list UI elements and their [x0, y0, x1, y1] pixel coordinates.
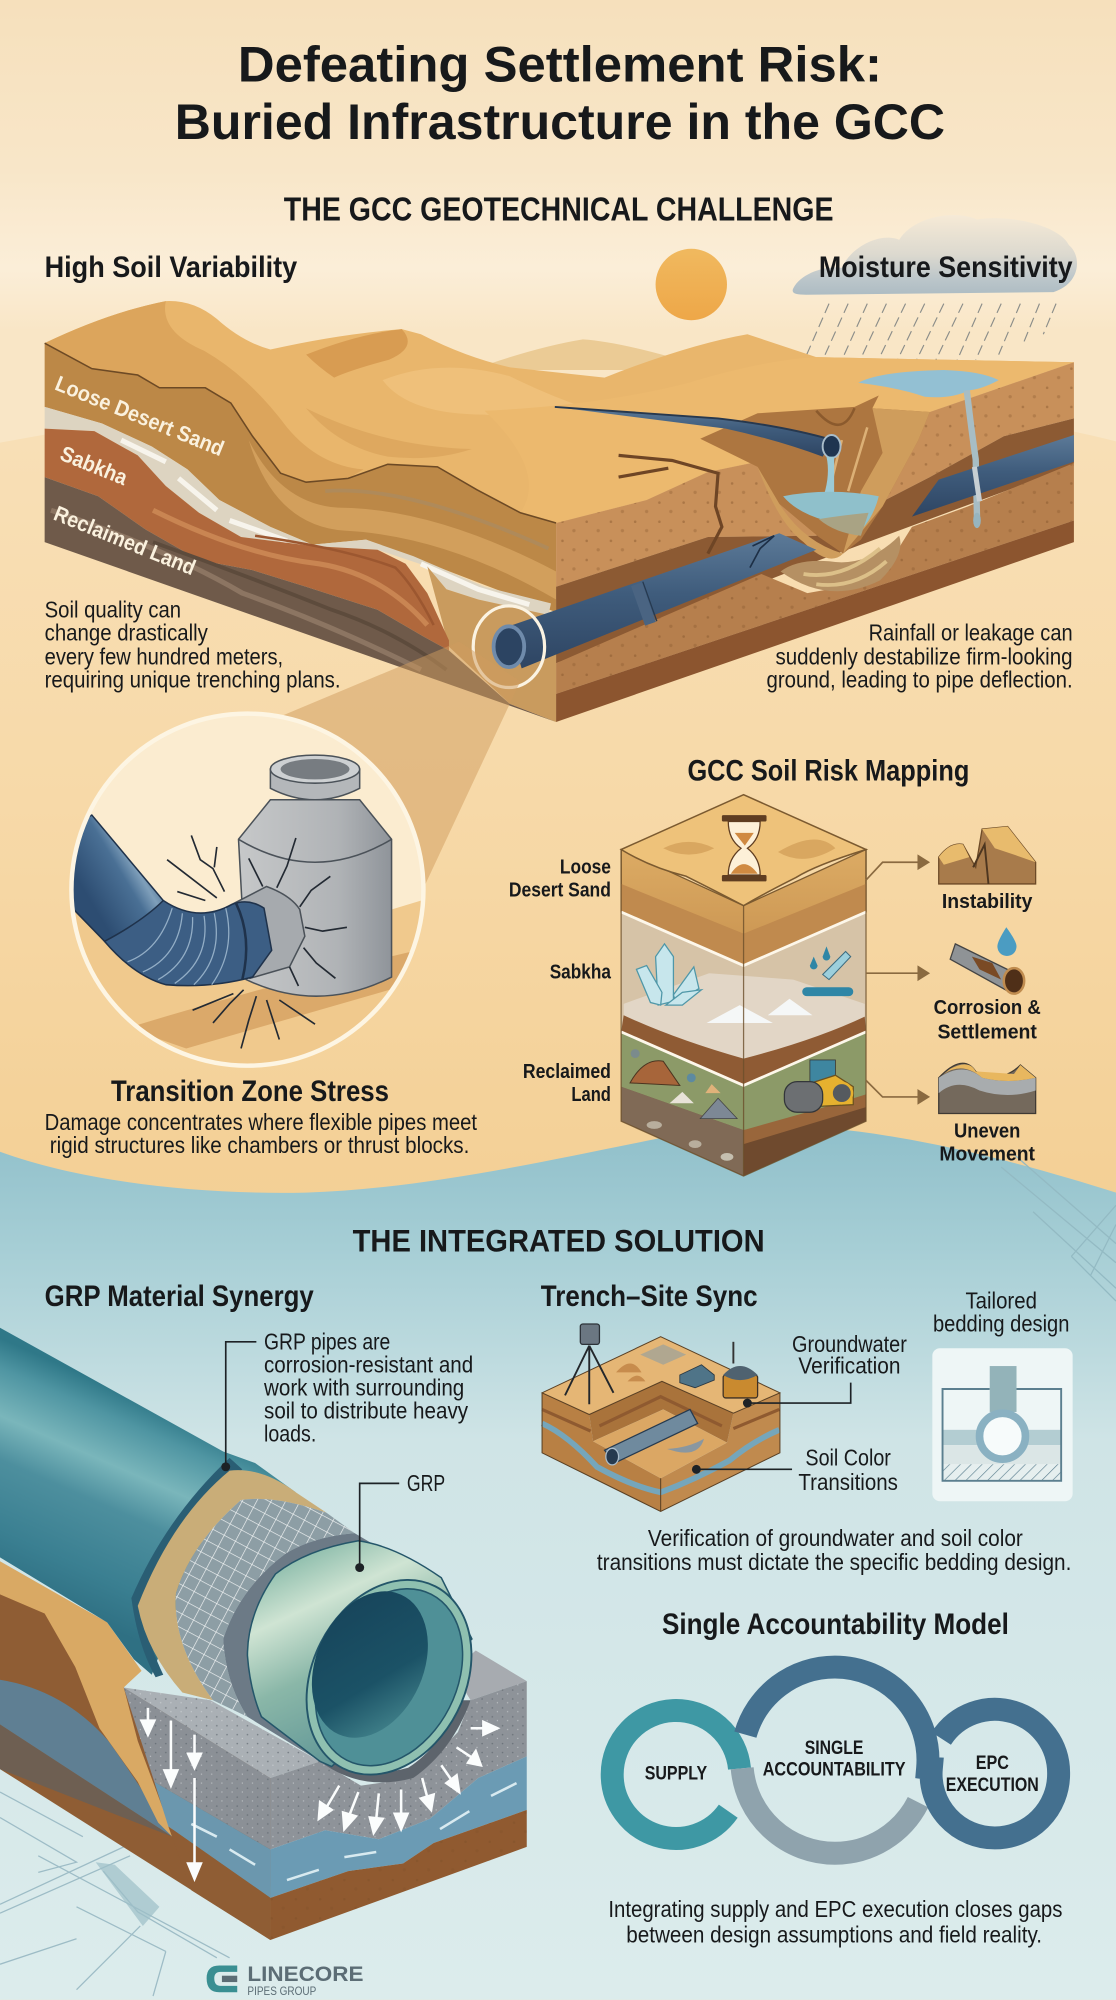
label: EPC execution: EPC — [976, 1753, 1009, 1774]
label: corrosion and settlement: Corrosion & — [934, 997, 1041, 1019]
beam from pipe to detail lens — [255, 642, 520, 899]
label: corrosion and settlement: Settlement — [937, 1021, 1037, 1043]
heading: the integrated solution: THE INTEGRATED SOLUTION — [353, 1222, 765, 1258]
left face: white sabkha band — [45, 407, 551, 615]
icon: salt crystals — [636, 944, 701, 1005]
labels: soil types: Land — [571, 1084, 611, 1106]
text block: rainfall: suddenly destabilize firm-looking — [775, 644, 1073, 670]
icon: survey mosaic and mounds — [616, 1344, 686, 1381]
trench left face blue band — [154, 1782, 270, 1898]
label: uneven movement: Uneven — [954, 1121, 1020, 1143]
blueprint sketch: top right — [1001, 1154, 1116, 1301]
labels: soil types — [509, 857, 611, 1106]
labels: soil types: Sabkha — [550, 961, 611, 983]
far dune — [472, 339, 714, 370]
icon: corrosion pipe — [950, 927, 1024, 994]
text block: rainfall: ground, leading to pipe deflection. — [767, 667, 1073, 693]
right face: upper sand — [556, 362, 1074, 587]
text block: soil quality: change drastically — [45, 619, 208, 645]
lower main pipe — [494, 533, 816, 668]
label: GRP: GRP — [407, 1470, 445, 1496]
trench front face gravel — [270, 1681, 527, 1849]
icon: concrete chamber — [239, 755, 392, 996]
ring: single accountability lower grey — [742, 1768, 918, 1853]
ring: supply teal — [612, 1710, 739, 1838]
right face: lower dark stripe — [556, 520, 1074, 722]
label: single accountability: ACCOUNTABILITY — [763, 1759, 906, 1780]
logo: Linecore Pipes Group — [207, 1961, 363, 1998]
text block: transition zone — [45, 1109, 478, 1158]
heading: trench site sync: Trench–Site Sync — [541, 1280, 758, 1313]
block outline — [542, 1393, 780, 1511]
text block: soil quality: Soil quality can — [45, 596, 181, 622]
labels: soil types: Reclaimed — [523, 1061, 611, 1083]
label: supply: SUPPLY — [645, 1763, 707, 1784]
plateau surface — [485, 357, 1074, 523]
icon: corrosive drops — [802, 946, 853, 996]
callout line: GRP pipes — [221, 1342, 256, 1471]
trench top surface — [124, 1687, 320, 1778]
block right face — [661, 1393, 780, 1511]
second dune shadow — [306, 329, 408, 378]
text block: GRP pipes: soil to distribute heavy — [264, 1397, 469, 1423]
chart: linked accountability rings — [612, 1667, 1059, 1853]
heading: GCC soil risk mapping: GCC Soil Risk Mapping — [687, 755, 969, 788]
text block: transition zone: rigid structures like chambers or thrust blocks. — [50, 1132, 469, 1158]
column upper sand side — [621, 849, 866, 966]
title — [175, 37, 945, 150]
text block: GRP pipes — [263, 1328, 473, 1446]
callout line: GRP — [355, 1483, 399, 1572]
heading: transition zone stress: Transition Zone Stress — [111, 1075, 389, 1108]
left face: sand wedge under sabkha — [427, 566, 556, 722]
text block: GRP pipes: work with surrounding — [263, 1374, 464, 1400]
water seam — [542, 1423, 779, 1492]
marker ring — [473, 606, 545, 688]
icon: flange — [227, 886, 305, 978]
column sabkha layer — [621, 912, 866, 1085]
label: tailored bedding design — [933, 1288, 1069, 1337]
text block: soil quality: every few hundred meters, — [45, 644, 283, 670]
illustration: GRP pipe in trench — [0, 1328, 527, 1940]
upper broken pipe — [555, 407, 841, 458]
blue water band — [270, 1756, 527, 1898]
panel: bedding design diagram — [932, 1348, 1073, 1501]
icon: hourglass — [722, 815, 767, 881]
label: tailored bedding design: bedding design — [933, 1311, 1069, 1337]
right face: lower tan soil — [556, 463, 1074, 694]
text block: verification: transitions must dictate the specific bedding design. — [597, 1549, 1071, 1575]
icon: sun — [656, 249, 727, 320]
reinforcement mesh — [176, 1499, 355, 1717]
brown band — [270, 1810, 527, 1940]
blueprint sketch: bottom left — [0, 1792, 230, 1996]
icon: white salt piles — [707, 999, 812, 1023]
icon: flexible blue pipe elbow — [64, 815, 272, 986]
pit floor — [593, 1409, 727, 1478]
label: uneven movement: Movement — [939, 1144, 1035, 1166]
background: sand hills — [0, 383, 1116, 1224]
label: single accountability: SINGLE — [805, 1738, 864, 1759]
text block: integrating supply: Integrating supply and EPC execution closes gaps — [608, 1896, 1062, 1922]
icon: sensor and equipment — [680, 1342, 758, 1398]
block left face — [542, 1393, 661, 1511]
label: single accountability — [763, 1738, 906, 1780]
label: groundwater verification — [792, 1331, 907, 1379]
heading: GRP material synergy: GRP Material Synergy — [45, 1280, 314, 1313]
soil left face — [0, 1562, 270, 1940]
trench left face gravel — [124, 1687, 270, 1849]
soil strata — [542, 1397, 779, 1431]
lens ground — [75, 900, 421, 1064]
trench left face brown — [168, 1826, 270, 1940]
water layer left — [0, 1680, 172, 1837]
text block: verification — [597, 1525, 1071, 1575]
swirled soil below crater — [781, 536, 900, 591]
cross-section top line — [45, 343, 556, 523]
text block: integrating supply: between design assumptions and field reality. — [626, 1922, 1042, 1948]
pit back wall — [589, 1381, 733, 1443]
label: soil color transitions: Soil Color — [805, 1445, 891, 1471]
text block: integrating supply — [608, 1896, 1062, 1948]
layer label: sabkha: Sabkha — [57, 441, 132, 490]
text block: rainfall — [767, 619, 1073, 693]
text block: GRP pipes: loads. — [264, 1420, 316, 1446]
label: soil color transitions — [798, 1445, 898, 1495]
background: desert sky — [0, 0, 1116, 1275]
label: tailored bedding design: Tailored — [965, 1288, 1037, 1314]
dune shaded flank — [45, 301, 363, 482]
left face: base sand strata — [45, 343, 556, 612]
heading: moisture sensitivity: Moisture Sensitivity — [819, 251, 1073, 284]
icon: uneven movement — [939, 1063, 1036, 1114]
water background lower section — [0, 1125, 1116, 2000]
label: corrosion and settlement — [934, 997, 1041, 1043]
grey wrap — [223, 1533, 395, 1761]
label: soil color transitions: Transitions — [798, 1469, 898, 1495]
callout: soil color line — [692, 1465, 792, 1474]
chart: soil risk column — [621, 795, 866, 1176]
dune surface — [45, 301, 1074, 523]
lower right pipe — [912, 435, 1074, 517]
heading: the GCC geotechnical challenge: THE GCC GEOTECHNICAL CHALLENGE — [284, 192, 833, 229]
green GRP liner and bore — [247, 1541, 504, 1803]
layer label: loose desert sand: Loose Desert Sand — [52, 371, 228, 461]
pipe body — [0, 1328, 296, 1675]
left face: grey-brown band — [45, 477, 556, 722]
illustration: trench site block — [542, 1324, 851, 1511]
column reclaimed layer — [621, 1032, 866, 1176]
text block: verification: Verification of groundwater and soil color — [648, 1525, 1023, 1551]
arrows: load distribution — [142, 1708, 497, 1879]
dune light patches — [383, 368, 587, 417]
illustration: soil block cross-section — [45, 301, 1074, 722]
logo: Linecore Pipes Group: LINECORE — [247, 1961, 363, 1986]
crater — [700, 395, 930, 554]
text block: GRP pipes: GRP pipes are — [264, 1328, 390, 1354]
labels: soil types: Desert Sand — [509, 880, 611, 902]
label: uneven movement — [939, 1121, 1035, 1166]
text block: transition zone: Damage concentrates where flexible pipes meet — [45, 1109, 478, 1135]
labels: soil types: Loose — [560, 857, 611, 879]
panel: transition zone detail lens — [64, 712, 434, 1084]
left face: strata stripes — [249, 440, 556, 600]
icon: rubble and soil piles — [630, 1049, 737, 1119]
arrows: soil to risk — [866, 856, 929, 1103]
text block: rainfall: Rainfall or leakage can — [869, 619, 1073, 645]
icon: instability — [939, 827, 1036, 884]
column top face — [621, 795, 866, 906]
logo: Linecore Pipes Group: PIPES GROUP — [247, 1984, 316, 1998]
layer label: reclaimed land: Reclaimed Land — [50, 501, 199, 580]
label: groundwater verification: Groundwater — [792, 1331, 907, 1357]
label: groundwater verification: Verification — [798, 1353, 900, 1379]
crater inner bank — [843, 408, 930, 554]
icon: road roller — [784, 1060, 853, 1112]
lens cracks — [167, 835, 347, 1048]
label: EPC execution: EXECUTION — [946, 1775, 1039, 1796]
text block: soil quality — [45, 596, 341, 693]
icon: rain cloud — [793, 215, 1077, 385]
heading: high soil variability: High Soil Variability — [45, 251, 298, 284]
ground cracks — [619, 455, 722, 554]
block top surface — [542, 1337, 780, 1415]
text block: soil quality: requiring unique trenching plans. — [45, 667, 341, 693]
tan collar — [138, 1470, 327, 1700]
ring: blue continuous into EPC — [745, 1667, 1059, 1838]
cradle shadow — [320, 1700, 471, 1782]
icon: survey tripod — [565, 1324, 613, 1404]
sand streak — [0, 1561, 179, 1843]
heading: single accountability model: Single Accountability Model — [662, 1608, 1009, 1641]
left face: red-brown band — [45, 429, 449, 651]
icon: pipe in trench — [605, 1409, 698, 1465]
water spill and pool — [783, 370, 999, 536]
label: instability: Instability — [942, 891, 1033, 913]
callout: groundwater line — [743, 1383, 851, 1407]
text block: GRP pipes: corrosion-resistant and — [264, 1351, 473, 1377]
title: Buried Infrastructure in the GCC — [175, 94, 945, 150]
label: EPC execution — [946, 1753, 1039, 1796]
title: Defeating Settlement Risk: — [238, 37, 882, 93]
right face: dark band behind pipe — [556, 418, 1074, 663]
